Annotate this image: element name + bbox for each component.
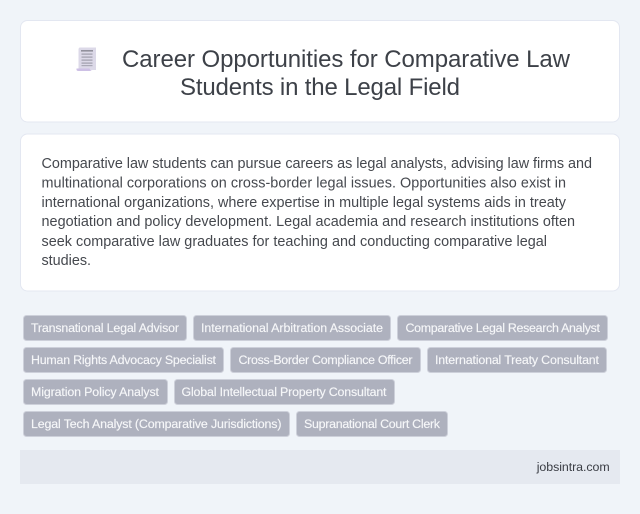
summary paragraph: negotiation and policy development. Legal academia and research institutions often bbox=[42, 214, 575, 230]
tag: Transnational Legal Advisor bbox=[24, 316, 186, 340]
summary paragraph: multinational corporations on cross-border legal issues. Opportunities also exist in bbox=[42, 176, 566, 192]
tag: Cross-Border Compliance Officer: Cross-Border Compliance Officer bbox=[238, 353, 412, 367]
title: Students in the Legal Field bbox=[180, 74, 460, 101]
tag: Legal Tech Analyst (Comparative Jurisdictions) bbox=[24, 412, 290, 436]
tag: Legal Tech Analyst (Comparative Jurisdictions): Legal Tech Analyst (Comparative Jurisdictions) bbox=[31, 417, 282, 431]
tag: Migration Policy Analyst: Migration Policy Analyst bbox=[31, 385, 160, 399]
title: Career Opportunities for Comparative Law bbox=[122, 46, 571, 73]
career tags bbox=[24, 316, 608, 436]
panel: summary text bbox=[20, 134, 620, 291]
footer source: jobsintra.com bbox=[536, 460, 610, 474]
tag: Supranational Court Clerk bbox=[296, 412, 448, 436]
tag: Human Rights Advocacy Specialist: Human Rights Advocacy Specialist bbox=[31, 353, 217, 367]
tag: Comparative Legal Research Analyst: Comparative Legal Research Analyst bbox=[406, 321, 601, 335]
tag: Migration Policy Analyst bbox=[24, 380, 168, 404]
tag: International Arbitration Associate bbox=[194, 316, 390, 340]
tag: International Treaty Consultant bbox=[428, 348, 606, 372]
summary paragraph: international organizations, where expertise in multiple legal systems aids in treaty bbox=[42, 195, 567, 211]
summary paragraph: Comparative law students can pursue careers as legal analysts, advising law firms and bbox=[42, 156, 592, 172]
tag: Global Intellectual Property Consultant: Global Intellectual Property Consultant bbox=[182, 385, 387, 399]
panel: header bbox=[20, 20, 620, 122]
tag: Transnational Legal Advisor: Transnational Legal Advisor bbox=[31, 321, 179, 335]
tag: International Arbitration Associate: International Arbitration Associate bbox=[201, 321, 383, 335]
icon: legal scroll document bbox=[76, 48, 96, 71]
summary paragraph: studies. bbox=[42, 253, 91, 269]
tag: Comparative Legal Research Analyst bbox=[398, 316, 608, 340]
tag: Supranational Court Clerk: Supranational Court Clerk bbox=[304, 417, 441, 431]
tag: International Treaty Consultant: International Treaty Consultant bbox=[435, 353, 600, 367]
footer bar bbox=[20, 450, 620, 484]
summary paragraph bbox=[42, 156, 592, 269]
tag: Cross-Border Compliance Officer bbox=[230, 348, 420, 372]
tag: Global Intellectual Property Consultant bbox=[174, 380, 394, 404]
summary paragraph: seek comparative law graduates for teaching and conducting comparative legal bbox=[42, 234, 547, 250]
tag: Human Rights Advocacy Specialist bbox=[24, 348, 224, 372]
title bbox=[122, 46, 571, 101]
